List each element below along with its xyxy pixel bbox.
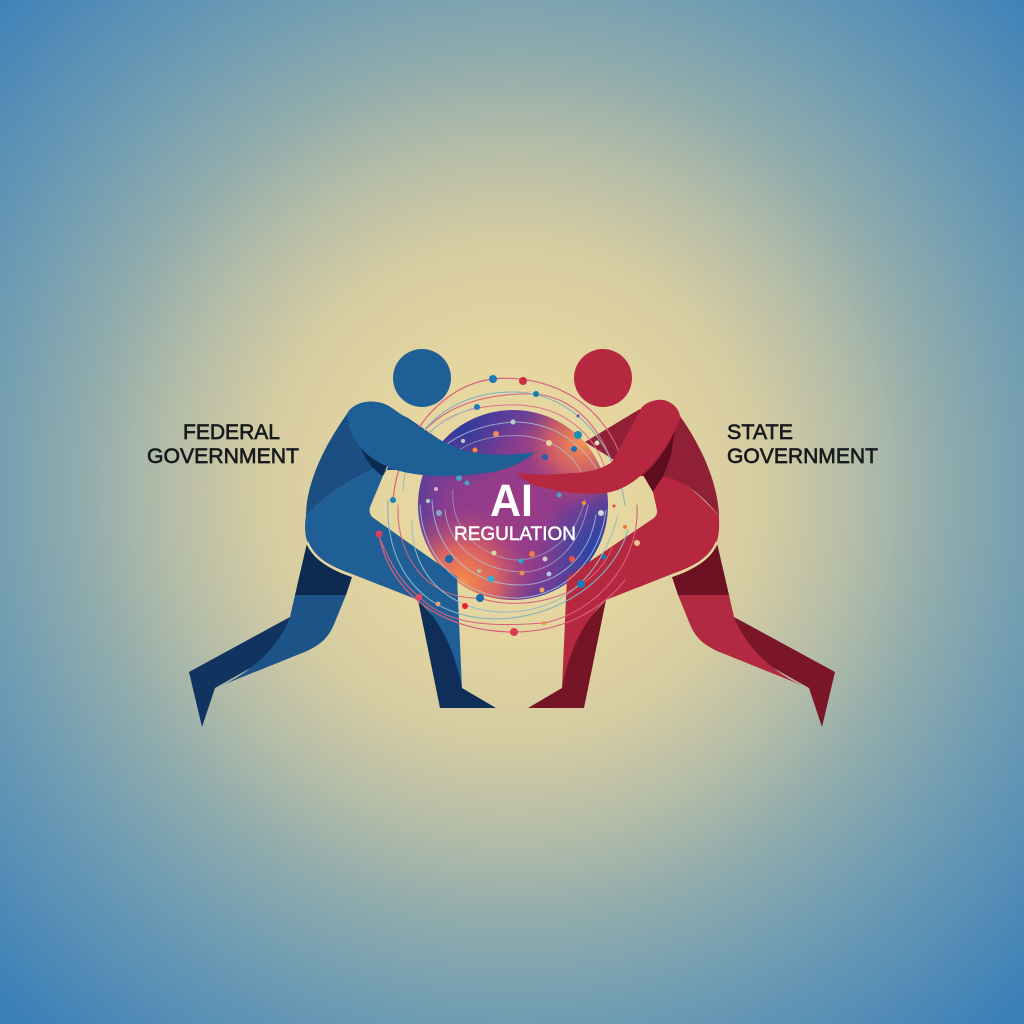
blue hip and thigh: [305, 468, 462, 688]
red head: [574, 349, 632, 407]
label: state government: GOVERNMENT: [727, 444, 878, 468]
sphere: AI core: [418, 410, 608, 600]
red back calf: [678, 595, 809, 688]
blue back thigh: [295, 543, 352, 595]
red hip highlight gap: [671, 542, 717, 576]
red front shin and foot: [528, 600, 606, 708]
red back foot: [724, 617, 835, 727]
arm: state government: [517, 400, 680, 494]
figure: federal government body: [189, 349, 496, 727]
arm: federal government: [347, 401, 535, 476]
orbits: data rings around the sphere: [378, 378, 637, 632]
label: regulation: REGULATION: [454, 524, 576, 545]
blue back foot: [189, 617, 300, 727]
blue hip highlight gap: [307, 542, 353, 576]
label: federal government: FEDERAL: [183, 420, 280, 444]
red hip and thigh: [562, 477, 719, 688]
blue torso: [306, 411, 446, 516]
label: federal government: GOVERNMENT: [147, 444, 299, 468]
blue front shin and foot: [418, 600, 496, 708]
label: AI: AI: [490, 475, 533, 526]
red torso: [585, 409, 719, 516]
red back thigh: [672, 543, 729, 595]
blue underarm shadow: [358, 437, 390, 476]
blue back calf: [215, 595, 346, 688]
red underarm shadow: [643, 430, 675, 492]
blue head: [393, 349, 451, 407]
figure: state government body: [528, 349, 835, 727]
data nodes on the rings: [376, 375, 640, 636]
label: state government: STATE: [727, 420, 793, 444]
